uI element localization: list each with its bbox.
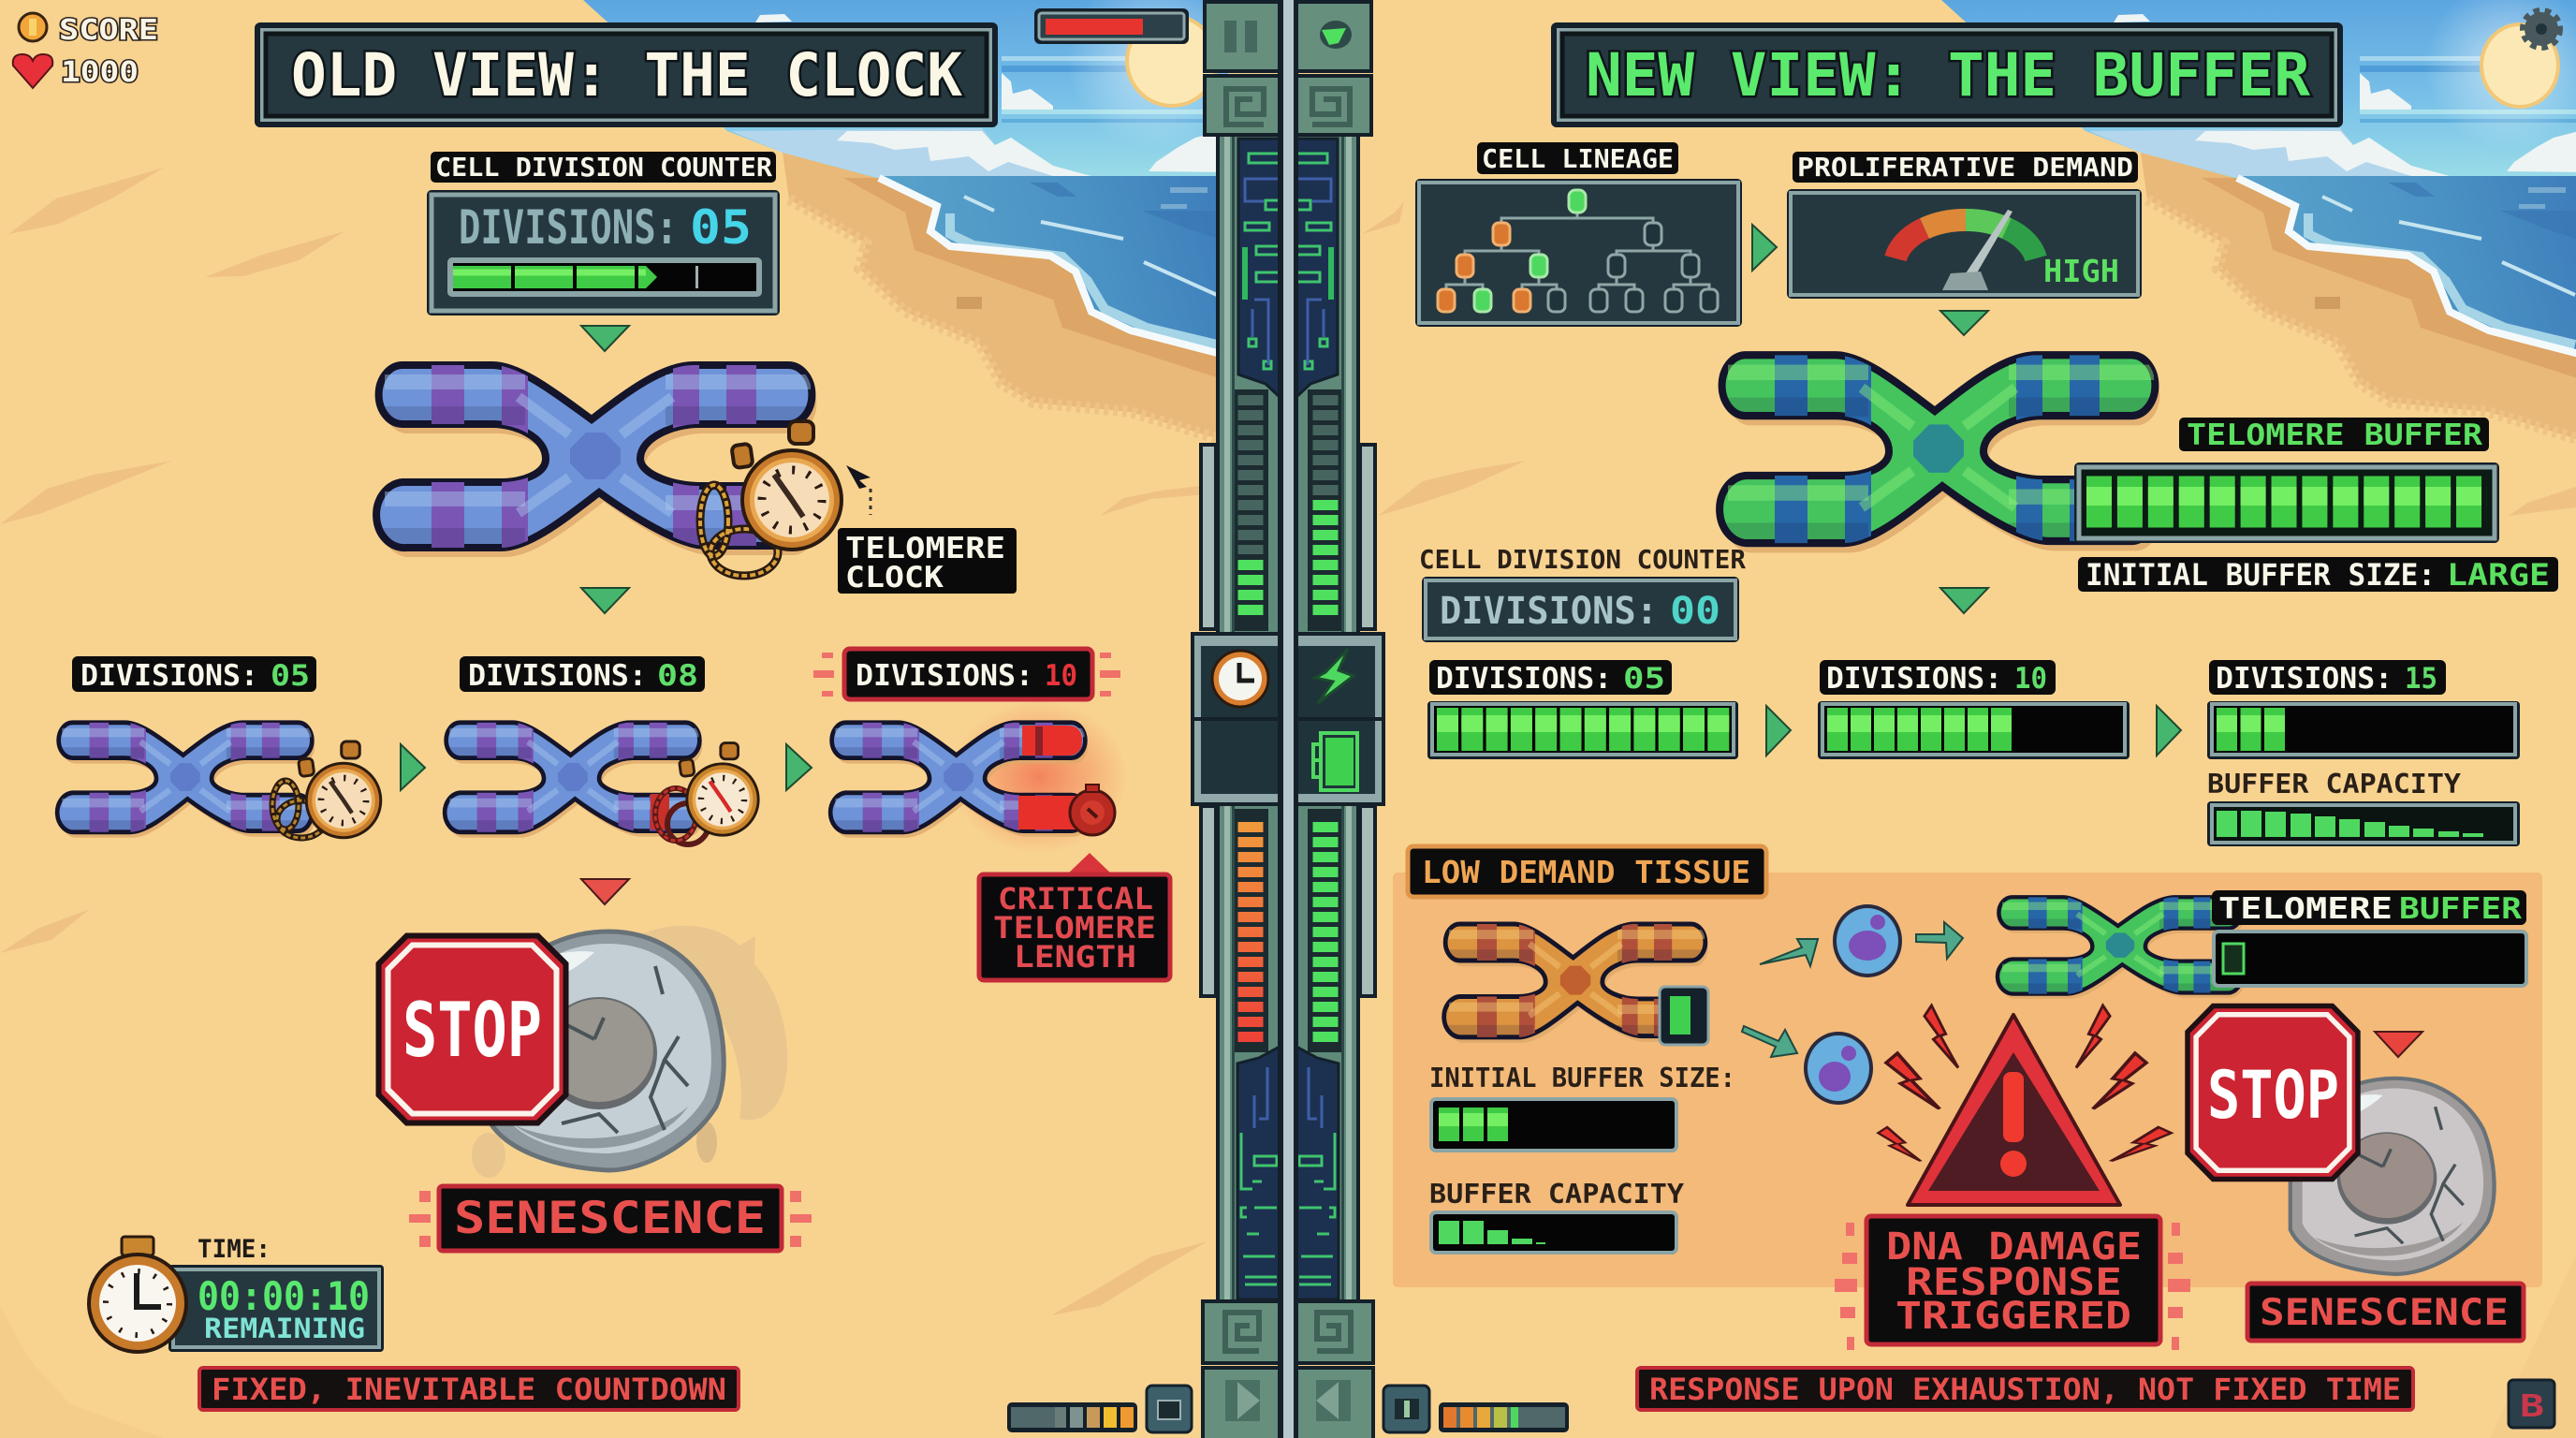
chromosome: large blue with purple bands — [375, 348, 816, 564]
arrow right — [1916, 922, 1963, 959]
arrow right — [786, 744, 812, 790]
cell upper — [1833, 904, 1902, 977]
icon: green gem — [1320, 21, 1352, 49]
icon: chain — [700, 485, 778, 576]
HUD: health bar — [1034, 8, 1189, 44]
panel: divisions counter 00: DIVISIONS: — [1440, 590, 1658, 633]
label: cell division counter: CELL DIVISION COUNTER — [435, 153, 772, 183]
arrow right — [401, 744, 425, 790]
stop sign: STOP — [402, 987, 542, 1074]
label: telomere buffer: TELOMERE BUFFER — [2187, 418, 2482, 452]
icon: short battery — [1660, 987, 1708, 1045]
central divider pillar — [1191, 0, 1385, 1438]
icon: cursor arrow — [846, 465, 871, 515]
panel: divisions counter 00: 00 — [1670, 590, 1720, 633]
icon: pause — [1224, 21, 1257, 52]
label: telomere buffer — [2212, 890, 2526, 926]
banner: response upon exhaustion: RESPONSE UPON EXHAUSTION, NOT FIXED TIME — [1649, 1372, 2401, 1407]
label: low demand tissue — [1408, 846, 1766, 897]
panel: divisions counter — [427, 190, 780, 315]
background: beach scene, left — [583, 0, 1228, 442]
timer — [87, 1235, 384, 1354]
HUD: score — [13, 13, 158, 89]
title: new view: NEW VIEW: THE BUFFER — [1586, 41, 2310, 110]
label: cell lineage: CELL LINEAGE — [1482, 144, 1674, 174]
title: old view — [255, 22, 998, 127]
cell lower — [1804, 1032, 1873, 1105]
banner: fixed, inevitable countdown: FIXED, INEVITABLE COUNTDOWN — [212, 1372, 726, 1407]
chromosome: orange short — [1443, 914, 1708, 1047]
arrow down — [581, 326, 629, 351]
icon: B button: B — [2520, 1387, 2544, 1424]
panel: divisions counter: DIVISIONS: — [459, 200, 678, 255]
icon: coin — [19, 13, 47, 41]
panel: low demand tissue — [1393, 846, 2542, 1287]
LED meter lower right: green — [1312, 822, 1339, 1047]
title: old view: OLD VIEW: THE CLOCK — [291, 41, 962, 110]
label: telomere clock — [838, 528, 1017, 594]
arrow up-right — [1760, 939, 1818, 966]
icon: settings gear — [2525, 12, 2558, 46]
bar: initial buffer small — [1431, 1099, 1676, 1151]
bottom meter left — [1007, 1402, 1137, 1432]
label: telomere buffer: BUFFER — [2399, 892, 2522, 926]
panel: demand gauge — [1787, 189, 2142, 299]
icon: warning triangle with lightning — [1878, 1005, 2172, 1205]
callout: dna damage response triggered: TRIGGERED — [1895, 1295, 2131, 1338]
chromosome: large green with blue bands — [1719, 338, 2159, 560]
callout: critical telomere length: LENGTH — [1014, 939, 1136, 975]
shadow behind senescent cell — [472, 926, 787, 1178]
label: divisions 05: 05 — [1623, 662, 1665, 696]
callout: critical telomere length — [979, 853, 1170, 980]
label: divisions 10: 10 — [2014, 662, 2047, 696]
telomere buffer bar: full — [2074, 462, 2499, 543]
stop sign — [378, 936, 565, 1123]
panel: divisions counter 00 — [1422, 577, 1739, 642]
chromosome: small green — [1997, 888, 2244, 1003]
callout: dna damage response triggered — [1835, 1216, 2190, 1350]
label: initial buffer size: INITIAL BUFFER SIZE: — [1429, 1063, 1735, 1093]
label: senescence — [2247, 1284, 2524, 1341]
red glow — [950, 700, 1128, 854]
icon: clock — [1212, 651, 1268, 707]
callout: critical telomere length: CRITICAL — [998, 881, 1153, 917]
label: divisions 15 — [2209, 660, 2446, 696]
label: senescence: SENESCENCE — [2260, 1292, 2509, 1334]
panel: cell lineage tree — [1415, 179, 1742, 327]
label: divisions 10 critical: 10 — [1045, 659, 1077, 693]
arrow down-right — [1742, 1026, 1797, 1057]
sun, left — [1067, 0, 1245, 150]
label: telomere clock: CLOCK — [845, 561, 944, 594]
arrow down — [1940, 588, 1988, 613]
callout: dna damage response triggered: RESPONSE — [1906, 1261, 2122, 1304]
LED meter lower left: orange to red — [1237, 822, 1264, 1047]
callout: critical telomere length: TELOMERE — [993, 910, 1156, 946]
label: telomere clock: TELOMERE — [845, 532, 1005, 565]
label: divisions 10 critical — [813, 649, 1120, 699]
label: initial buffer size large: INITIAL BUFFER SIZE: — [2086, 557, 2436, 593]
arrow right — [2157, 706, 2181, 756]
icon: pocket watch — [731, 421, 843, 551]
chromosome stage 2 with watch — [445, 712, 760, 844]
senescent cell — [2291, 1078, 2495, 1274]
timer: TIME: — [198, 1235, 271, 1264]
arrow down red — [2375, 1032, 2422, 1057]
arrow right — [1766, 706, 1791, 756]
LED meter upper left — [1237, 395, 1264, 616]
HUD: score: 1000 — [61, 56, 139, 89]
icon: battery — [1313, 733, 1357, 790]
icon: lightning bolt — [1315, 649, 1354, 703]
label: proliferative demand: PROLIFERATIVE DEMAND — [1797, 153, 2133, 183]
icon: stopwatch — [87, 1237, 188, 1354]
label: divisions 05: DIVISIONS: — [80, 659, 258, 693]
background: beach scene, right — [1941, 0, 2576, 442]
arrow right — [1752, 225, 1777, 271]
arrow down — [581, 588, 629, 613]
label: senescence: SENESCENCE — [454, 1193, 766, 1244]
bottom meter right — [1439, 1402, 1569, 1432]
label: divisions 10 critical: DIVISIONS: — [856, 659, 1033, 693]
stop sign — [2188, 1005, 2495, 1274]
label: divisions 10: DIVISIONS: — [1826, 662, 2002, 696]
timer: 00:00:10 — [198, 1273, 370, 1319]
progress bar — [447, 257, 762, 297]
buffer bar: 3 of 12 — [2207, 701, 2520, 759]
chromosome stage 1 with watch — [57, 712, 382, 842]
label: divisions 05: 05 — [271, 659, 310, 693]
label: divisions 15: DIVISIONS: — [2216, 662, 2393, 696]
label: buffer capacity: BUFFER CAPACITY — [1429, 1179, 1685, 1210]
label: divisions 05: DIVISIONS: — [1436, 662, 1612, 696]
label: divisions 08 — [460, 656, 705, 693]
bar: buffer capacity small — [1431, 1212, 1676, 1253]
icon: B button — [2509, 1380, 2554, 1428]
label: divisions 15: 15 — [2405, 662, 2437, 696]
LED meter upper right — [1312, 395, 1339, 616]
buffer bar: 8 of 12 — [1818, 701, 2130, 759]
timer: REMAINING — [204, 1313, 365, 1344]
icon: small button right — [1383, 1386, 1429, 1432]
senescent cell — [487, 932, 724, 1170]
label: initial buffer size large: LARGE — [2447, 557, 2550, 593]
buffer capacity bar: declining — [2207, 801, 2520, 846]
panel: demand gauge: HIGH — [2043, 253, 2119, 289]
telomere buffer bar: nearly empty — [2214, 932, 2526, 986]
label: low demand tissue: LOW DEMAND TISSUE — [1422, 854, 1750, 890]
title: new view — [1551, 22, 2343, 127]
label: divisions 08: 08 — [657, 659, 698, 693]
callout: dna damage response triggered: DNA DAMAGE — [1886, 1225, 2142, 1269]
label: divisions 05 — [72, 656, 316, 693]
arrow down — [1940, 311, 1988, 335]
label: buffer capacity: BUFFER CAPACITY — [2207, 769, 2462, 800]
icon: small button left — [1147, 1386, 1192, 1432]
sun, right — [2424, 0, 2576, 150]
label: telomere buffer: TELOMERE — [2218, 892, 2393, 926]
label: divisions 05 — [1429, 660, 1672, 696]
panel: divisions counter: 05 — [690, 200, 752, 255]
arrow down red — [581, 879, 629, 904]
label: divisions 08: DIVISIONS: — [468, 659, 647, 693]
icon: heart — [13, 54, 52, 88]
HUD: score: SCORE — [59, 14, 158, 47]
chromosome stage 3 critical — [830, 712, 1115, 842]
label: cell division counter: CELL DIVISION COUNTER — [1419, 545, 1746, 575]
stop sign: STOP — [2207, 1057, 2339, 1134]
buffer bar: 12 of 12 — [1427, 701, 1738, 759]
label: senescence — [409, 1186, 812, 1251]
